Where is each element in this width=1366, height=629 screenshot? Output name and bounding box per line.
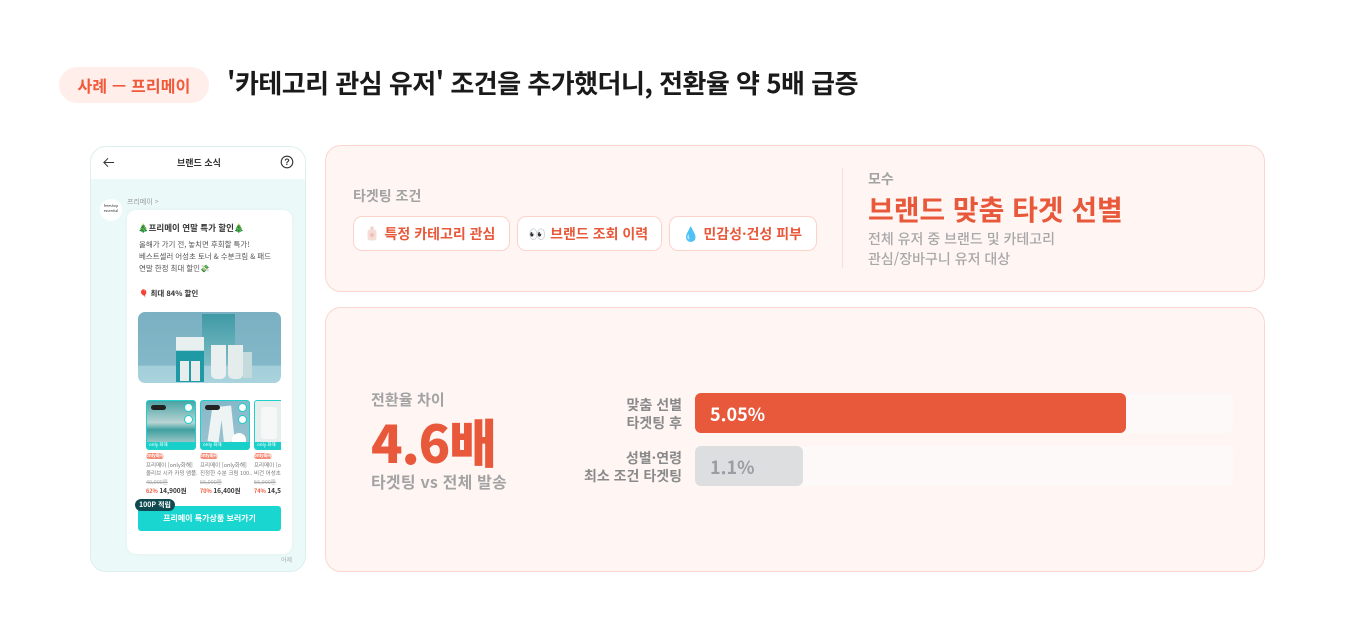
- brand avatar: essential: [104, 208, 118, 214]
- audience headline: 브랜드 맞춤 타겟 선별: [868, 189, 1123, 229]
- bar fill 1: [695, 393, 1126, 433]
- audience description: [868, 229, 1055, 269]
- brand band: only 화해: [149, 442, 168, 448]
- bar label: targeted: [627, 395, 682, 433]
- bar track 2: [695, 446, 1233, 486]
- bar label: targeted: 타겟팅 후: [627, 413, 682, 433]
- audience description: 전체 유저 중 브랜드 및 카테고리: [868, 229, 1055, 249]
- caption: 타겟팅 vs 전체 발송: [371, 469, 507, 493]
- bar label: baseline: 성별·연령: [626, 448, 682, 468]
- chip: sensitive dry skin: [669, 216, 817, 251]
- timestamp: 어제: [281, 555, 292, 564]
- phone header bar: [91, 147, 305, 179]
- product text 1: 프리메이 [only화해]: [146, 461, 193, 469]
- product text 2: 프리메이 [only화해]: [200, 461, 247, 469]
- teal box: [176, 337, 204, 382]
- chip: sensitive dry skin: 💧 민감성·건성 피부: [682, 224, 802, 244]
- product text 3: 56,000원: [254, 478, 276, 486]
- brand avatar: [100, 199, 122, 221]
- icon: help: [280, 156, 294, 168]
- message body: [139, 239, 271, 274]
- tube right: [220, 406, 235, 442]
- sender name: 프리메이 >: [127, 197, 159, 207]
- product card 1: [146, 400, 196, 450]
- tube one: [211, 345, 226, 379]
- tag pill: [205, 405, 220, 410]
- round icon: [238, 403, 247, 412]
- brand band: [255, 442, 281, 449]
- tag pill: [151, 405, 166, 410]
- backdrop box: [202, 314, 235, 364]
- product card 3: [254, 400, 281, 450]
- bottle: [261, 407, 277, 439]
- product card 2: [200, 400, 250, 450]
- message card: [127, 210, 292, 554]
- bar fill 2: [695, 446, 803, 486]
- tube two: [228, 345, 243, 379]
- brand band: [201, 442, 249, 449]
- product photo: [138, 312, 281, 383]
- round icon: [184, 403, 193, 412]
- bar label: baseline: 최소 조건 타겟팅: [584, 466, 682, 486]
- phone header title: 브랜드 소식: [177, 156, 221, 169]
- message body: 올해가 가기 전, 놓치면 후회할 특가!: [139, 239, 250, 250]
- bar label: baseline: [584, 448, 682, 486]
- gift circle: [232, 433, 246, 447]
- product text 2: only화해: [200, 453, 218, 459]
- brand band: only 화해: [203, 442, 222, 448]
- message heading: 🎄프리메이 연말 특가 할인🎄: [138, 222, 245, 234]
- chip: category interest: 특정 카테고리 관심: [384, 224, 495, 244]
- brand band: only 화해: [257, 442, 276, 448]
- bar label: targeted: 맞춤 선별: [627, 395, 682, 415]
- product text 1: [146, 453, 198, 495]
- product text 1: only화해: [146, 453, 164, 459]
- title: '카테고리 관심 유저' 조건을 추가했더니, 전환율 약 5배 급증: [227, 64, 858, 101]
- brand band: [147, 442, 195, 449]
- audience description: 관심/장바구니 유저 대상: [868, 249, 1010, 269]
- panel: conversion difference: [325, 307, 1265, 572]
- panel: targeting conditions: [325, 145, 1265, 292]
- product text 2: 70% 16,400원: [200, 485, 241, 495]
- tube left: [208, 405, 223, 443]
- bar fill 1: 5.05%: [710, 401, 765, 427]
- bar chart: [584, 393, 1126, 486]
- product text 2: 56,000원: [200, 478, 222, 486]
- tag: case label: [59, 67, 209, 103]
- icon: back arrow: [103, 158, 114, 167]
- message body: 연말 한정 최대 할인💸: [139, 263, 209, 274]
- chip: category interest: [353, 216, 510, 251]
- label: targeting conditions: 타겟팅 조건: [353, 186, 421, 206]
- chip: brand view history: 👀 브랜드 조회 이력: [529, 224, 648, 244]
- big number: 4.6배: [371, 403, 496, 478]
- panel: phone message mockup: [90, 146, 306, 572]
- label: conversion difference: 전환율 차이: [371, 389, 445, 410]
- bar track 1: [695, 393, 1233, 433]
- product text 1: 62% 14,900원: [146, 485, 187, 495]
- product text 3: [254, 453, 281, 495]
- tag: case label: 사례 — 프리메이: [78, 73, 190, 97]
- product text 1: 40,000원: [146, 478, 168, 486]
- round icon: [184, 415, 193, 424]
- divider between targeting and audience: [842, 168, 843, 268]
- product text 3: only화해: [254, 453, 272, 459]
- discount line: 🎈 최대 84% 할인: [139, 288, 198, 299]
- icon: help: ?: [284, 157, 290, 167]
- product text 2: [200, 453, 252, 495]
- chip: brand view history: [517, 216, 662, 251]
- label: audience: 모수: [868, 169, 894, 189]
- bottle: [243, 352, 252, 378]
- bar fill 2: 1.1%: [710, 454, 754, 480]
- message body: 베스트셀러 어성초 토너 & 수분크림 & 패드: [139, 251, 271, 262]
- call to action button: [138, 506, 281, 531]
- call to action button: 프리메이 특가상품 보러가기: [163, 513, 256, 524]
- box tube 2: [191, 361, 200, 381]
- box tube: [180, 361, 189, 381]
- points badge: 100P 적립: [139, 500, 171, 510]
- brand avatar: freeshop: [104, 204, 118, 209]
- points badge: [135, 499, 175, 511]
- round icon: [238, 415, 247, 424]
